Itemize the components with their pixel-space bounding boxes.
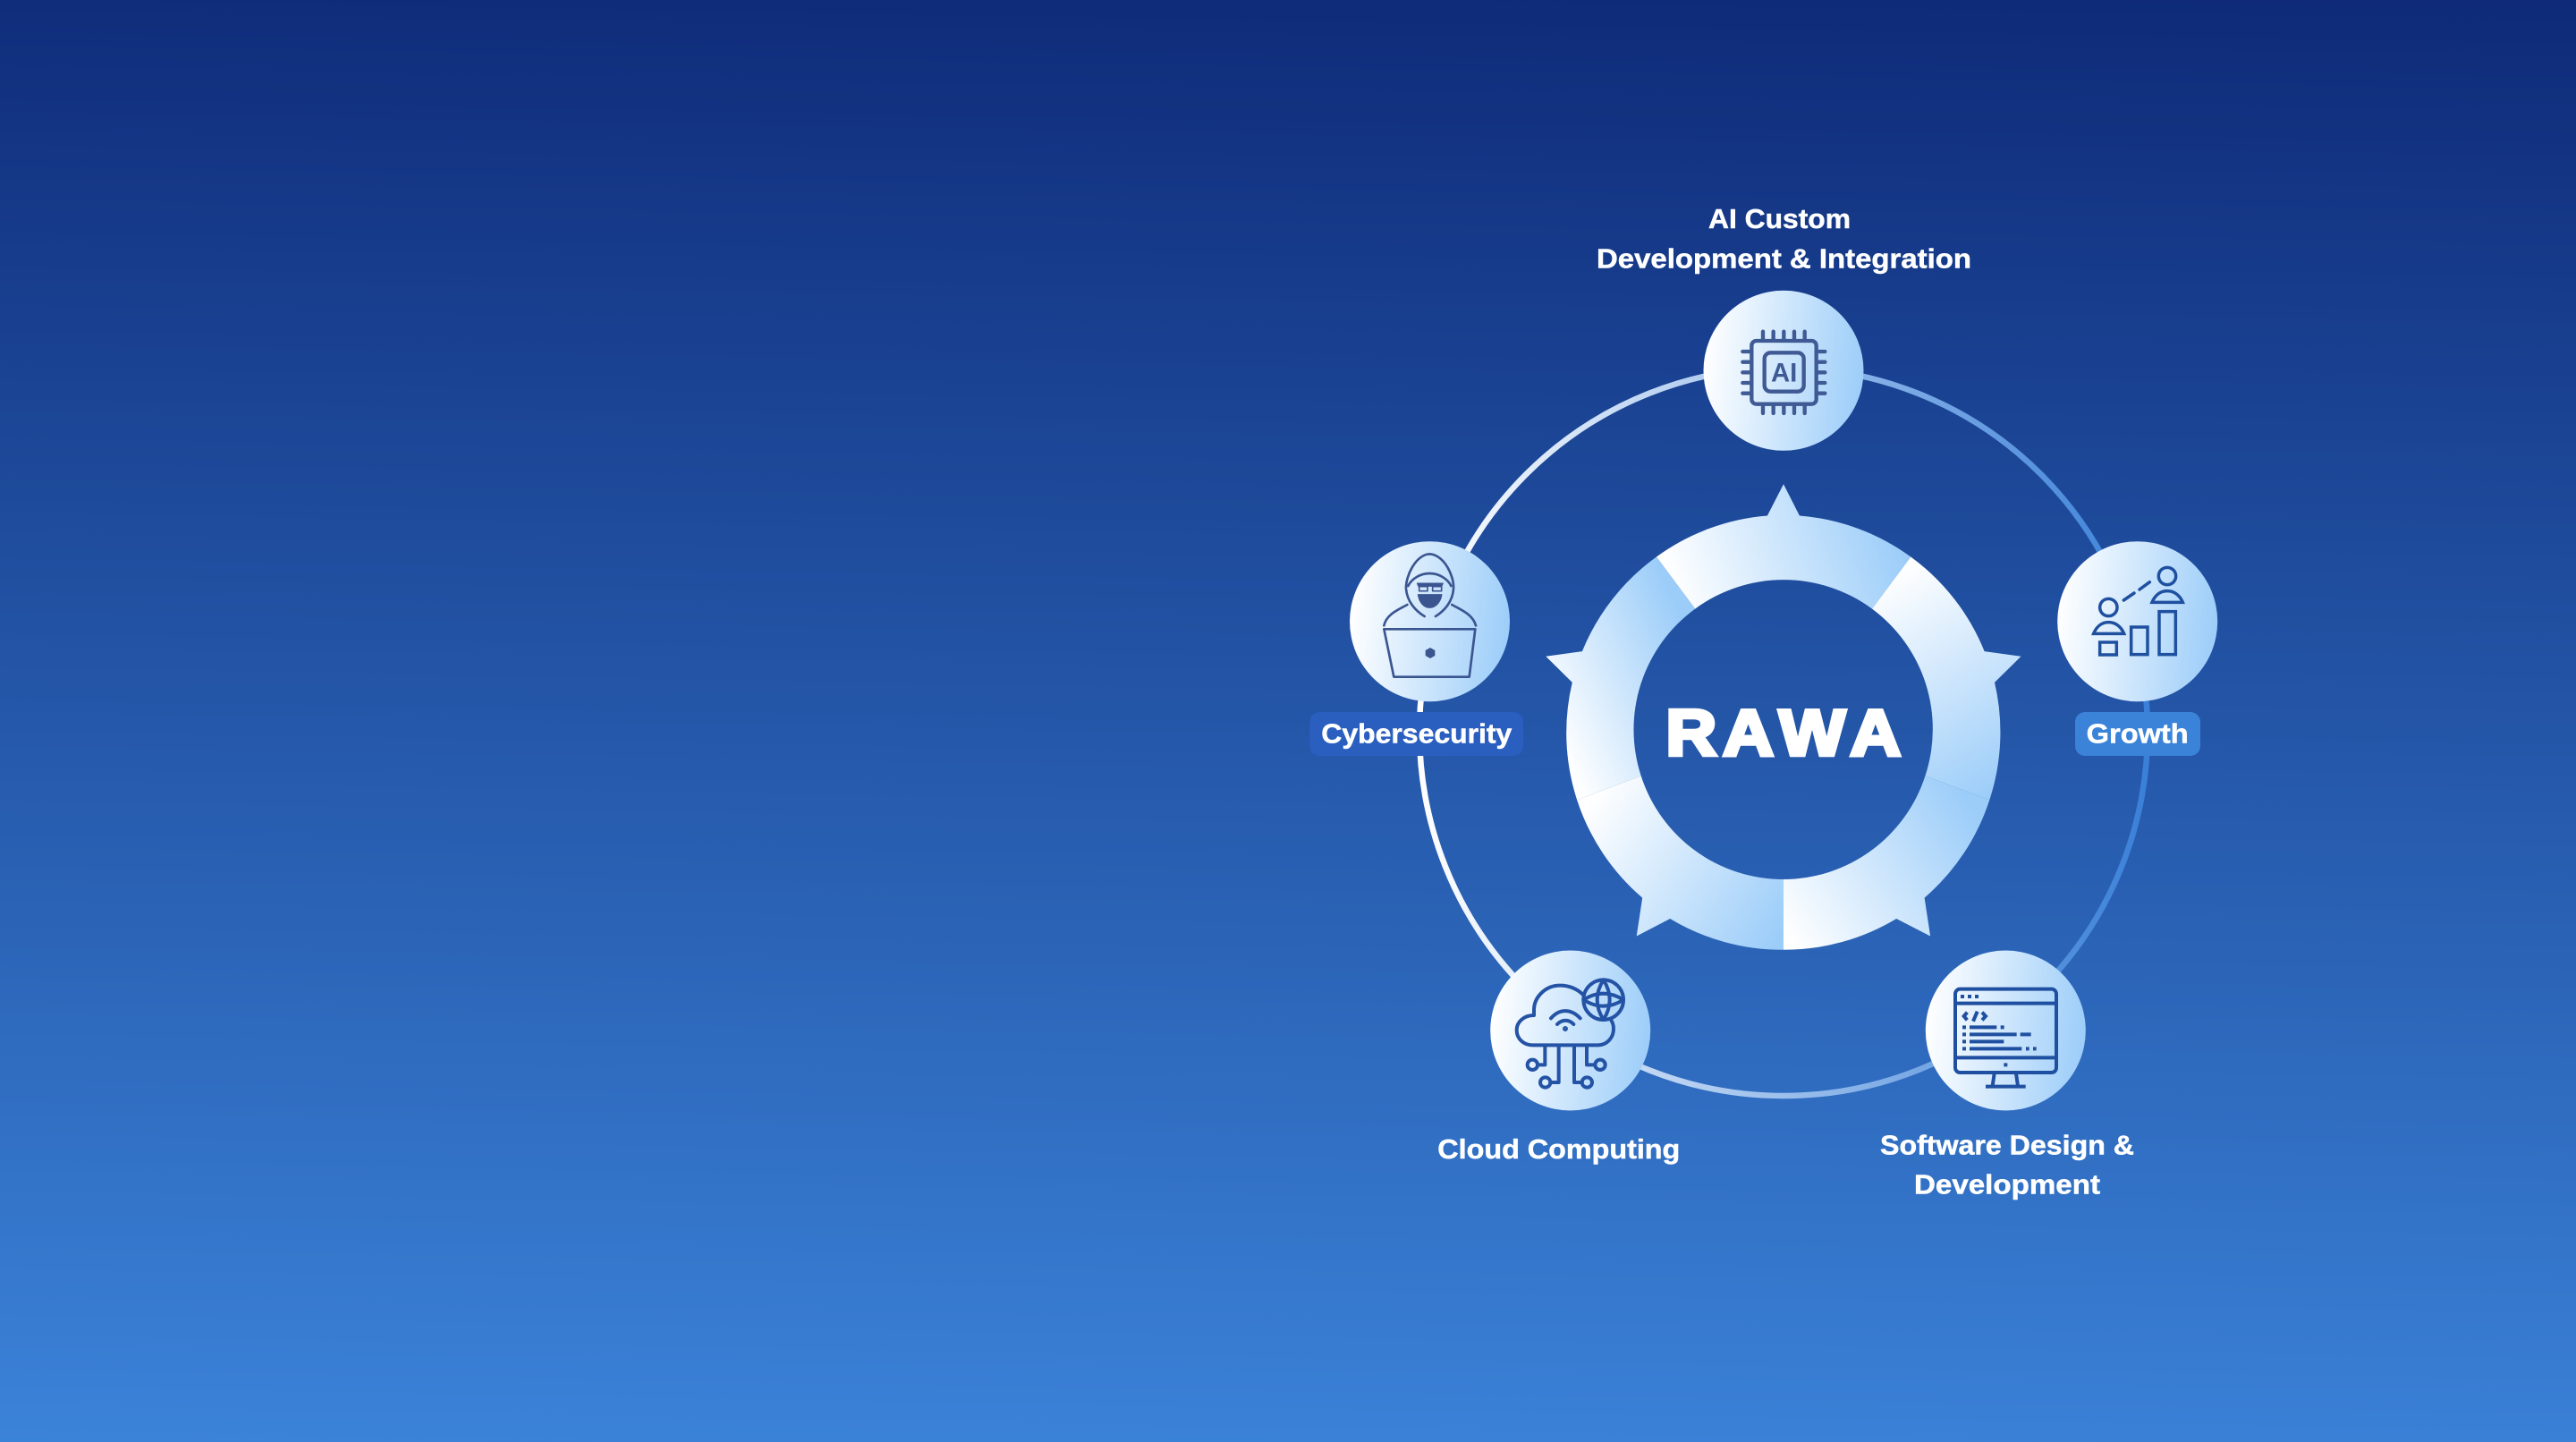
center title: RAWA: RAWA	[1666, 697, 1901, 768]
node: Cloud Computing	[1437, 950, 1680, 1165]
label: Software Design & Development	[1880, 1130, 2134, 1200]
node: Software Design & Development	[1880, 950, 2134, 1200]
ring segment: top	[1657, 484, 1911, 609]
icon: AI chip	[1742, 332, 1825, 413]
icon: cloud with globe and circuit	[1517, 980, 1623, 1088]
icon: growth people and bars	[2094, 567, 2182, 655]
icon: code monitor	[1955, 989, 2056, 1087]
icon: hacker with laptop	[1384, 554, 1476, 677]
icon circle: cloud	[1490, 950, 1650, 1111]
label: AI Custom Development & Integration: AI Custom	[1708, 203, 1851, 234]
ring segment: upper left	[1546, 556, 1695, 800]
ring segment: lower right	[1784, 776, 1989, 950]
label: Growth: Growth	[2087, 718, 2189, 750]
node: AI custom development	[1597, 203, 1971, 451]
label: Software Design & Development: Software Design &	[1880, 1130, 2134, 1161]
node: Growth	[2057, 541, 2217, 756]
ring segment: upper right	[1872, 556, 2021, 800]
label: AI Custom Development & Integration: Development & Integration	[1597, 242, 1971, 274]
node: Cybersecurity	[1309, 541, 1523, 756]
icon circle: software	[1926, 950, 2086, 1111]
icon circle: growth	[2057, 541, 2217, 701]
label: Software Design & Development: Development	[1914, 1168, 2100, 1200]
icon circle: cybersecurity	[1350, 541, 1510, 701]
label: AI Custom Development & Integration	[1597, 203, 1971, 274]
central segmented ring	[1546, 484, 2021, 950]
icon circle: AI	[1703, 291, 1864, 451]
icon: AI chip: AI	[1771, 359, 1797, 388]
label pill: Cybersecurity	[1309, 712, 1523, 756]
label: Cybersecurity: Cybersecurity	[1321, 718, 1513, 750]
outer orbit ring	[1419, 368, 2148, 1096]
label pill: Growth	[2075, 712, 2200, 756]
label: Cloud Computing: Cloud Computing	[1437, 1133, 1680, 1165]
ring segment: lower left	[1577, 776, 1784, 950]
